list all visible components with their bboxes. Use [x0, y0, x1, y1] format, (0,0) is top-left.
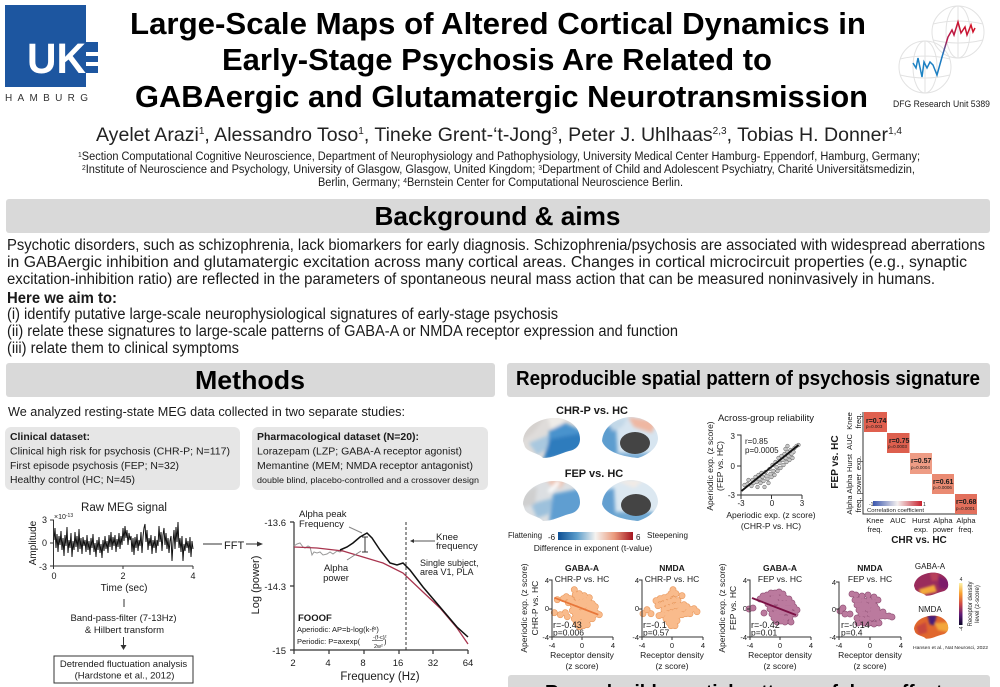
scatter: NMDA CHR-P: 4	[635, 576, 639, 585]
brain maps: CHR-P vs HC: CHR-P vs. HC	[556, 405, 628, 417]
scatter: NMDA CHR-P: -4	[632, 633, 639, 642]
scatter: GABA-A FEP: -4	[740, 633, 747, 642]
chart: power spectrum FOOOF: )	[384, 637, 387, 646]
receptor density maps: 4	[960, 577, 963, 583]
scatter: GABA-A FEP: Aperiodic exp. (z score)	[717, 563, 727, 653]
title: Early-Stage Psychosis Are Related to	[222, 42, 772, 77]
heatmap: CHR vs FEP correlations: p=0.0004	[911, 465, 930, 470]
flow: band-pass to DFA: Band-pass-filter (7-13Hz)	[70, 613, 177, 624]
chart: raw MEG signal: Amplitude	[28, 520, 39, 565]
receptor density maps: NMDA	[918, 605, 942, 614]
scatter: GABA-A CHR-P: r=-0.43	[553, 620, 582, 630]
chart: across-group reliability: 0	[770, 499, 775, 508]
heatmap: CHR vs FEP correlations: 1	[923, 502, 926, 508]
heatmap: CHR vs FEP correlations: CHR vs. HC	[891, 535, 947, 546]
scatter: NMDA CHR-P	[632, 563, 705, 671]
panel: methods	[5, 363, 495, 683]
scatter: GABA-A CHR-P: 4	[611, 641, 615, 650]
chart: power spectrum FOOOF: Log (power)	[250, 556, 262, 614]
brain maps: FEP vs HC	[521, 468, 658, 524]
heatmap: CHR vs FEP correlations: p=0.0003	[888, 444, 907, 449]
scatter: GABA-A CHR-P: Aperiodic exp. (z score)	[519, 563, 529, 653]
pharmacological dataset box: double blind, placebo-controlled and a crossover design	[257, 475, 479, 485]
chart: power spectrum FOOOF: Aperiodic: AP=b-log(k-f	[297, 625, 374, 634]
chart: power spectrum FOOOF: 8	[360, 658, 366, 669]
scatter: GABA-A CHR-P: CHR-P vs. HC	[555, 574, 609, 584]
heatmap: CHR vs FEP correlations: Alpha	[845, 474, 854, 494]
title: GABAergic and Glutamatergic Neurotransmission	[135, 79, 868, 114]
heading: methods	[6, 363, 495, 397]
aims list: (ii) relate these signatures to large-scale patterns of GABA-A or NMDA receptor expression and function	[7, 323, 678, 340]
box: detrended fluctuation analysis: Detrended fluctuation analysis	[60, 659, 187, 670]
panel: reproducible spatial pattern of psychosis signature	[507, 363, 990, 671]
chart: across-group reliability: Across-group reliability	[718, 413, 814, 424]
scatter: NMDA CHR-P: 0	[670, 641, 674, 650]
arrow: FFT	[203, 540, 263, 552]
scatter: GABA-A FEP: 4	[743, 576, 747, 585]
scatter: NMDA CHR-P: 4	[701, 641, 705, 650]
chart: power spectrum FOOOF: area V1, PLA	[420, 567, 474, 577]
heatmap: CHR vs FEP correlations: p=0.0006	[933, 485, 952, 490]
scatter: GABA-A CHR-P: GABA-A	[565, 563, 599, 573]
chart: power spectrum FOOOF: 2	[290, 658, 296, 669]
heatmap: CHR vs FEP correlations: Correlation coefficient	[867, 508, 925, 514]
scatter: GABA-A FEP: FEP vs. HC	[758, 574, 802, 584]
chart: across-group reliability: p=0.0005	[745, 446, 779, 455]
aims list: Here we aim to:	[7, 290, 117, 307]
scatter: NMDA FEP: 4	[899, 641, 903, 650]
scatter: NMDA CHR-P: -4	[639, 641, 645, 650]
scatter: GABA-A CHR-P: 0	[545, 604, 549, 613]
heading: methods: Methods	[195, 365, 305, 395]
scatter: NMDA FEP: 0	[832, 605, 836, 614]
logo: UKE Hamburg: UK	[27, 35, 86, 83]
scatter: NMDA FEP: p=0.4	[841, 628, 863, 638]
affiliations: 4	[403, 178, 407, 185]
authors: , Peter J. Uhlhaas	[557, 124, 713, 146]
authors: 1	[199, 126, 205, 137]
scatter: GABA-A FEP: FEP vs. HC	[728, 586, 738, 630]
heatmap: CHR vs FEP correlations: AUC	[845, 434, 854, 450]
heading: drug effects (cropped)	[508, 675, 990, 687]
scatter: GABA-A FEP: -4	[747, 641, 753, 650]
scatter: GABA-A FEP: p=0.01	[751, 628, 778, 638]
logo: DFG research unit	[893, 6, 990, 110]
heatmap: CHR vs FEP correlations: freq.	[854, 497, 863, 513]
background text: excitation-inhibition ratio) are reflected in the parameters of spontaneous neural mass action that can be measured noninvasively in humans.	[7, 271, 935, 288]
chart: power spectrum FOOOF: 64	[463, 658, 473, 669]
scatter: NMDA CHR-P: Receptor density	[640, 650, 705, 660]
chart: raw MEG signal	[28, 502, 196, 594]
heading: background and aims: Background & aims	[374, 201, 620, 231]
chart: across-group reliability: 0	[731, 462, 736, 471]
background text: in GABAergic inhibition and glutamatergic excitation across many cortical areas. Changes in cortical microcircuit properties (e.g., synaptic	[7, 254, 967, 271]
colorbar: difference in exponent: 6	[636, 533, 641, 542]
heatmap: CHR vs FEP correlations: Knee	[866, 516, 884, 525]
heatmap: CHR vs FEP correlations: r=0.75	[889, 438, 910, 445]
clinical dataset box	[5, 427, 240, 490]
authors: 2,3	[713, 126, 727, 137]
heatmap: CHR vs FEP correlations: power	[854, 473, 863, 494]
background text: Psychotic disorders, such as schizophrenia, lack biomarkers for early diagnosis. Schizophrenia/psychosis are associated with widespread aberrations	[7, 237, 985, 254]
heatmap: CHR vs FEP correlations: Knee	[845, 412, 854, 430]
scatter: NMDA FEP	[829, 563, 903, 671]
chart: power spectrum FOOOF: Periodic: P=axexp(	[297, 637, 361, 646]
chart: across-group reliability: -3	[728, 491, 736, 500]
heatmap: CHR vs FEP correlations: p=0.0001	[956, 506, 975, 511]
chart: raw MEG signal: 2	[120, 571, 126, 581]
pharmacological dataset box	[252, 427, 488, 490]
receptor density maps: Hansen et al., Nat Neurosci, 2022	[913, 645, 988, 651]
box: detrended fluctuation analysis: (Hardstone et al., 2012)	[75, 670, 174, 682]
heatmap: CHR vs FEP correlations: Hurst	[912, 516, 931, 525]
clinical dataset box: First episode psychosis (FEP; N=32)	[10, 461, 179, 472]
affiliations: Section Computational Cognitive Neuroscience, Department of Neurophysiology and Pathophysiology, University Medical Center Hamburg- Eppendorf, Hamburg, Germany;	[82, 151, 920, 163]
scatter: NMDA CHR-P: p=0.57	[643, 628, 670, 638]
chart: raw MEG signal: -3	[39, 562, 47, 572]
heatmap: CHR vs FEP correlations: Alpha	[933, 516, 953, 525]
logo: UKE Hamburg	[5, 5, 98, 104]
clinical dataset box: Healthy control (HC; N=45)	[10, 475, 135, 486]
colorbar: difference in exponent: Steepening	[647, 531, 688, 540]
chart: power spectrum FOOOF	[250, 509, 479, 683]
heatmap: CHR vs FEP correlations: AUC	[890, 516, 906, 525]
clinical dataset box: Clinical dataset:	[10, 432, 90, 443]
chart: power spectrum FOOOF: x	[374, 626, 377, 632]
heatmap: CHR vs FEP correlations: freq.	[958, 525, 974, 534]
affiliations: 2	[82, 165, 86, 172]
chart: across-group reliability: Aperiodic exp. (z score)	[705, 421, 715, 511]
aims list	[7, 290, 678, 357]
chart: across-group reliability: 3	[731, 432, 736, 441]
chart: raw MEG signal: Time (sec)	[101, 583, 147, 594]
chart: power spectrum FOOOF: )	[376, 625, 379, 634]
heatmap: CHR vs FEP correlations: Alpha	[845, 495, 854, 515]
heatmap: CHR vs FEP correlations: p=0.003	[866, 424, 883, 429]
scatter: NMDA CHR-P: CHR-P vs. HC	[645, 574, 699, 584]
box: detrended fluctuation analysis	[54, 656, 193, 683]
heatmap: CHR vs FEP correlations: power	[933, 525, 954, 534]
chart: power spectrum FOOOF: power	[323, 573, 349, 584]
scatter: NMDA FEP: 4	[832, 578, 836, 587]
scatter: NMDA CHR-P: r=-0.1	[643, 620, 667, 630]
scatter: NMDA FEP: (z score)	[853, 661, 887, 671]
chart: power spectrum FOOOF: 4	[325, 658, 331, 669]
chart: raw MEG signal: -13	[66, 513, 73, 519]
chart: power spectrum FOOOF: Alpha peak	[299, 509, 347, 520]
affiliations: Department of Child and Adolescent Psychiatry, Charité Universitätsmedizin,	[542, 164, 915, 176]
scatter: NMDA CHR-P: (z score)	[655, 661, 689, 671]
background text	[7, 237, 985, 288]
scatter: GABA-A CHR-P	[519, 563, 615, 671]
aims list: (iii) relate them to clinical symptoms	[7, 340, 239, 357]
pharmacological dataset box: Lorazepam (LZP; GABA-A receptor agonist)	[257, 446, 462, 458]
flow: band-pass to DFA: & Hilbert transform	[85, 625, 164, 636]
title	[130, 6, 868, 114]
authors: , Tobias H. Donner	[727, 124, 889, 146]
scatter: GABA-A CHR-P: 4	[545, 576, 549, 585]
brain maps: CHR-P vs HC	[521, 405, 658, 461]
chart: across-group reliability: r=0.85	[745, 437, 768, 446]
chart: power spectrum FOOOF: FOOOF	[298, 613, 332, 624]
chart: power spectrum FOOOF: -14.3	[264, 582, 286, 593]
heatmap: CHR vs FEP correlations: FEP vs. HC	[830, 435, 841, 489]
logo: UKE Hamburg: HAMBURG	[5, 93, 88, 104]
scatter: NMDA CHR-P: NMDA	[659, 563, 685, 573]
chart: raw MEG signal: ×10	[54, 514, 66, 521]
chart: raw MEG signal: Raw MEG signal	[81, 502, 167, 514]
receptor density maps	[913, 562, 988, 651]
arrow: FFT: FFT	[224, 540, 244, 552]
heatmap: CHR vs FEP correlations: freq.	[854, 413, 863, 429]
scatter: GABA-A CHR-P: -4	[549, 641, 555, 650]
scatter: GABA-A FEP: (z score)	[763, 661, 797, 671]
chart: power spectrum FOOOF: Knee	[436, 532, 458, 543]
chart: power spectrum FOOOF: Alpha	[324, 563, 349, 574]
heatmap: CHR vs FEP correlations: exp.	[914, 525, 928, 534]
authors: 1	[358, 126, 364, 137]
heatmap: CHR vs FEP correlations: Hurst	[845, 453, 854, 472]
chart: power spectrum FOOOF: 32	[428, 658, 438, 669]
clinical dataset box: Clinical high risk for psychosis (CHR-P; N=117)	[10, 446, 230, 458]
chart: power spectrum FOOOF: -13.6	[264, 518, 286, 529]
chart: power spectrum FOOOF: Single subject,	[420, 558, 479, 568]
scatter: NMDA FEP: Receptor density	[838, 650, 903, 660]
scatter: GABA-A FEP: 0	[778, 641, 782, 650]
scatter: GABA-A FEP: GABA-A	[763, 563, 797, 573]
heatmap: CHR vs FEP correlations: r=0.57	[911, 458, 932, 465]
chart: power spectrum FOOOF: Frequency	[299, 519, 344, 530]
scatter: GABA-A FEP: r=-0.42	[751, 620, 780, 630]
chart: raw MEG signal: 4	[190, 571, 196, 581]
scatter: GABA-A CHR-P: Receptor density	[550, 650, 615, 660]
scatter: GABA-A FEP: Receptor density	[748, 650, 813, 660]
authors: , Alessandro Toso	[204, 124, 358, 146]
chart: across-group reliability: 3	[800, 499, 805, 508]
colorbar: difference in exponent: Flattening	[508, 531, 542, 540]
scatter: GABA-A CHR-P: CHR-P vs. HC	[530, 581, 540, 635]
affiliations: Bernstein Center for Computational Neuroscience Berlin.	[407, 177, 683, 189]
colorbar: difference in exponent: -6	[548, 533, 556, 542]
chart: across-group reliability: -3	[737, 499, 745, 508]
scatter: NMDA FEP: NMDA	[857, 563, 883, 573]
scatter: NMDA FEP: r=-0.14	[841, 620, 870, 630]
scatter: NMDA FEP: -4	[829, 633, 836, 642]
heatmap: CHR vs FEP correlations: exp.	[854, 456, 863, 470]
scatter: NMDA CHR-P: 0	[635, 604, 639, 613]
heatmap: CHR vs FEP correlations: r=0.61	[933, 479, 954, 486]
methods intro: We analyzed resting-state MEG data collected in two separate studies:	[8, 404, 405, 419]
chart: across-group reliability: (CHR-P vs. HC)	[741, 521, 801, 531]
chart: across-group reliability: (FEP vs. HC)	[715, 441, 725, 491]
scatter: NMDA FEP: FEP vs. HC	[848, 574, 892, 584]
chart: raw MEG signal: 0	[42, 538, 47, 548]
chart: power spectrum FOOOF: -15	[272, 646, 286, 657]
scatter: GABA-A CHR-P: p=0.006	[553, 628, 584, 638]
scatter: GABA-A FEP	[717, 563, 813, 671]
chart: raw MEG signal: 0	[51, 571, 57, 581]
pharmacological dataset box: Memantine (MEM; NMDA receptor antagonist)	[257, 461, 473, 472]
colorbar: difference in exponent	[508, 531, 688, 553]
aims list: (i) identify putative large-scale neurophysiological signatures of early-stage psychosis	[7, 306, 558, 323]
affiliations	[78, 151, 920, 189]
authors: Ayelet Arazi	[96, 124, 199, 146]
scatter: GABA-A FEP: 4	[809, 641, 813, 650]
affiliations: 1	[78, 152, 82, 159]
authors: 1,4	[888, 126, 902, 137]
authors: 3	[552, 126, 558, 137]
colorbar: difference in exponent: Difference in exponent (t-value)	[534, 543, 652, 553]
title: Large-Scale Maps of Altered Cortical Dynamics in	[130, 6, 866, 41]
heading: background and aims	[6, 199, 990, 233]
receptor density maps: level (z-score)	[975, 585, 981, 623]
flow: band-pass to DFA	[54, 599, 193, 683]
receptor density maps: Receptor density	[968, 581, 974, 627]
scatter: GABA-A CHR-P: -4	[542, 633, 549, 642]
pharmacological dataset box: Pharmacological dataset (N=20):	[257, 432, 419, 443]
heatmap: CHR vs FEP correlations: -1	[869, 502, 874, 508]
logo: DFG research unit: DFG Research Unit 5389	[893, 99, 990, 110]
chart: power spectrum FOOOF: -(f-c)²	[373, 635, 387, 641]
affiliations: Berlin, Germany;	[318, 177, 404, 189]
chart: across-group reliability: Aperiodic exp. (z score)	[726, 510, 816, 520]
brain maps: FEP vs HC: FEP vs. HC	[565, 468, 623, 480]
scatter: NMDA FEP: -4	[836, 641, 842, 650]
chart: across-group reliability	[705, 413, 816, 531]
panel: background and aims	[6, 199, 990, 357]
scatter: NMDA FEP: 0	[868, 641, 872, 650]
heatmap: CHR vs FEP correlations: freq.	[867, 525, 883, 534]
chart: power spectrum FOOOF: frequency	[436, 541, 478, 552]
heatmap: CHR vs FEP correlations: Alpha	[956, 516, 976, 525]
chart: power spectrum FOOOF: 2w²	[374, 644, 383, 650]
scatter: GABA-A CHR-P: 0	[580, 641, 584, 650]
receptor density maps: GABA-A	[915, 562, 946, 571]
chart: power spectrum FOOOF: 16	[393, 658, 403, 669]
affiliations: Institute of Neuroscience and Psychology, University of Glasgow, Glasgow, United Kingdom;	[86, 164, 538, 176]
receptor density maps: -4	[959, 626, 965, 631]
heading: psychosis signature	[507, 363, 990, 397]
heatmap: CHR vs FEP correlations: r=0.74	[866, 418, 887, 425]
heatmap: CHR vs FEP correlations: r=0.68	[956, 499, 977, 506]
chart: raw MEG signal: 3	[42, 515, 47, 525]
scatter: GABA-A FEP: 0	[743, 604, 747, 613]
affiliations: 3	[538, 165, 542, 172]
chart: power spectrum FOOOF: Frequency (Hz)	[340, 671, 420, 683]
authors: , Tineke Grent-‘t-Jong	[364, 124, 552, 146]
heatmap: CHR vs FEP correlations	[830, 412, 977, 546]
heading: psychosis signature: Reproducible spatial pattern of psychosis signature	[516, 368, 980, 390]
scatter: GABA-A CHR-P: (z score)	[565, 661, 599, 671]
